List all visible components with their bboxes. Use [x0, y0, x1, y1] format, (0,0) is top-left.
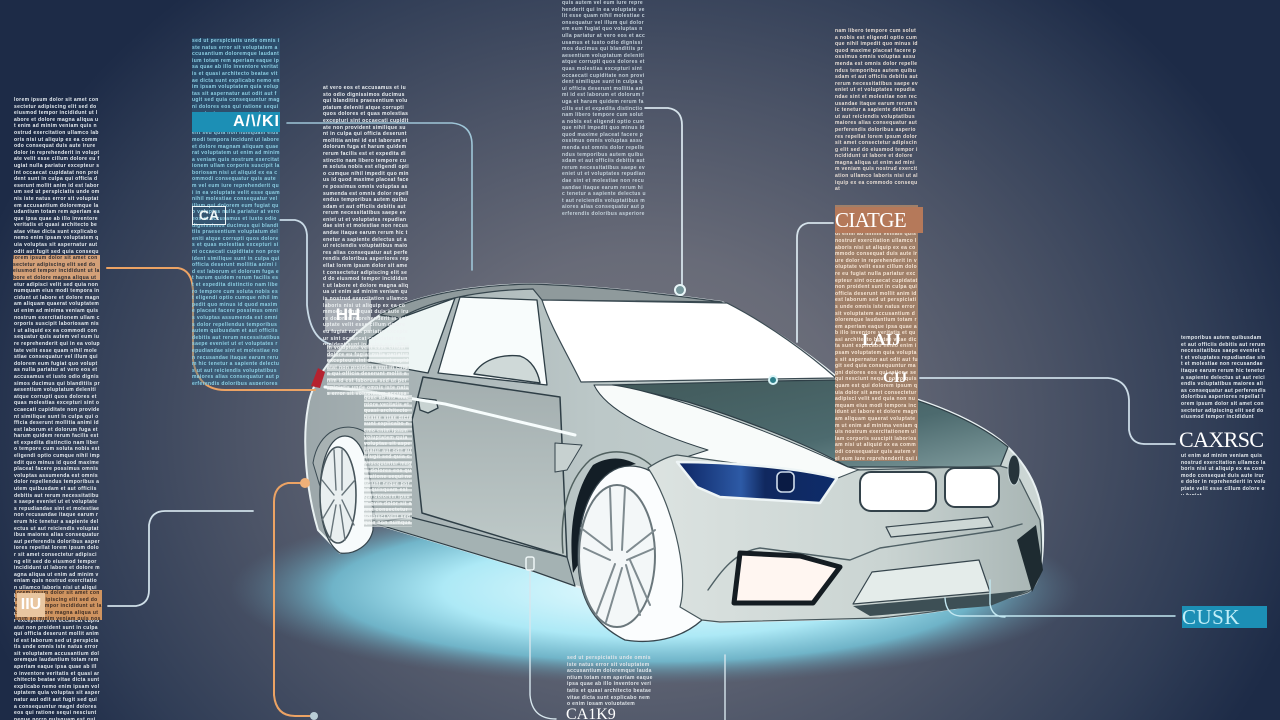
roof band — [380, 284, 722, 318]
front rim — [579, 485, 655, 627]
connector: bottom stub — [724, 655, 726, 720]
side mirror — [474, 356, 540, 383]
front wheel arch shadow — [571, 458, 636, 573]
connector: lower left white — [108, 511, 253, 606]
connector: right tall column to windshield — [797, 223, 833, 342]
cyan label — [192, 112, 280, 132]
dark lower lip — [853, 590, 1030, 616]
side vent — [555, 443, 582, 472]
headlight — [677, 462, 837, 503]
pin: orange wheel — [300, 478, 310, 488]
icon box label — [192, 206, 226, 225]
label CAXRSC: CAXRSC — [1179, 427, 1263, 452]
right headlight — [1008, 455, 1020, 485]
car body — [305, 284, 1043, 622]
connector: lower left orange — [274, 483, 310, 716]
connector: side skirt down — [530, 570, 556, 719]
door panel — [412, 377, 567, 557]
text column 6 upper: temporibus autem quibusdam et aut officiis debitis aut rerum necessitatibus saepe eveniet ut et voluptates repudiandae sint et molestiae non recusandae itaque earum rerum hic tenetur a sapiente delectus ut aut reiciendis voluptatibus maiores alias consequatur aut perferendis doloribus asperiores repellat lorem ipsum dolor sit amet consectetur adipiscing elit sed do eiusmod tempor incididunt — [1181, 335, 1266, 420]
bumper crease — [708, 524, 1022, 590]
lower orange band icon — [17, 593, 45, 617]
front spokes — [581, 488, 655, 622]
underbody glow — [230, 496, 1080, 684]
rear rim — [320, 447, 356, 543]
grille left — [860, 472, 936, 511]
pin: skirt — [526, 557, 534, 570]
connector: top column to roof pin — [645, 108, 682, 288]
white label on column 3: HH — [336, 305, 360, 324]
windshield — [542, 300, 836, 382]
fog light intake — [734, 553, 840, 603]
rear spokes — [322, 450, 355, 540]
cyan label CUSK: CUSK — [1182, 605, 1240, 629]
cyan label: A/\/KI — [233, 113, 280, 130]
headlight lens — [777, 472, 794, 492]
car — [305, 284, 1043, 641]
connector: right label — [920, 378, 1175, 444]
upper bumper vent — [886, 517, 993, 537]
connector: orange left label to tail light — [107, 268, 315, 390]
label CIATGE: CIATGE — [835, 208, 906, 232]
pin: cowl — [769, 376, 777, 384]
door handle — [418, 398, 438, 413]
hood — [612, 380, 1008, 467]
front side window — [438, 297, 547, 385]
front fascia — [648, 455, 1042, 622]
sill band — [373, 517, 575, 586]
grille right — [945, 468, 999, 507]
body highlight — [325, 387, 575, 435]
pin: roof — [675, 285, 685, 295]
connector: top blue label to roof — [287, 123, 472, 270]
hood white edge — [594, 385, 860, 478]
lower orange band icon: IIU — [21, 596, 41, 613]
lower grille — [853, 560, 990, 604]
label on orange column mid: LAIJ — [862, 330, 901, 349]
rear wheel arch — [313, 427, 375, 553]
text column 5 upper: nam libero tempore cum soluta nobis est eligendi optio cumque nihil impedit quo minus id quod maxime placeat facere possimus omnis voluptas assumenda est omnis dolor repellendus temporibus autem quibusdam et aut officiis debitis aut rerum necessitatibus saepe eveniet ut et voluptates repudiandae sint et molestiae non recusandae itaque earum rerum hic tenetur a sapiente delectus ut aut reiciendis voluptatibus maiores alias consequatur aut perferendis doloribus asperiores repellat lorem ipsum dolor sit amet consectetur adipiscing elit sed do eiusmod tempor incididunt ut labore et dolore magna aliqua ut enim ad minim veniam quis nostrud exercitation ullamco laboris nisi ut aliquip ex ea commodo consequat — [835, 28, 918, 192]
connectors — [107, 108, 1175, 720]
icon box label: CA — [199, 207, 219, 223]
rear side window — [368, 298, 455, 373]
pin: orange bottom — [310, 712, 318, 720]
rear tire — [320, 436, 373, 553]
front wheel arch outer — [562, 452, 653, 553]
dark bumper corner — [1017, 525, 1043, 592]
front tire — [578, 466, 702, 641]
white label on column 3 — [325, 299, 371, 331]
tail light — [311, 368, 325, 388]
connector: icon box to window — [280, 220, 330, 344]
cyan label CUSK — [1182, 606, 1267, 628]
icon box on orange column: CIJ — [883, 370, 907, 386]
connector: bumper to cyan label — [945, 580, 1175, 617]
